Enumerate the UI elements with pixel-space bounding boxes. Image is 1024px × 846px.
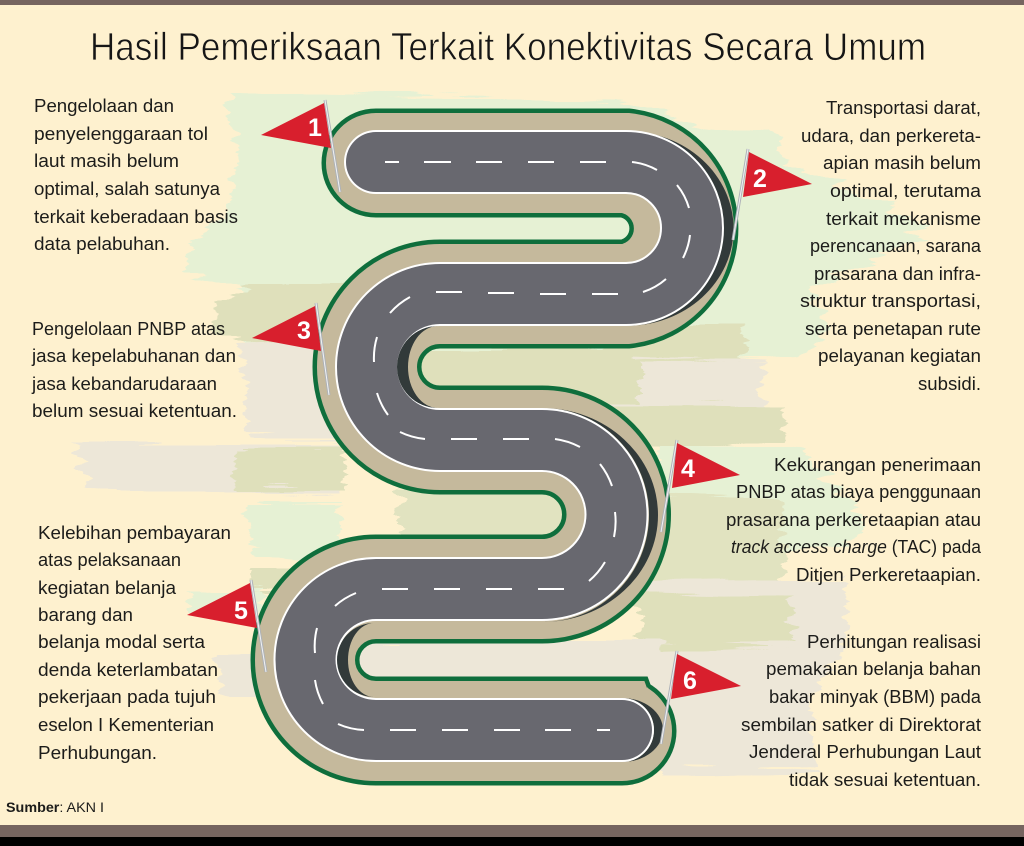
text block 6: tidak sesuai ketentuan.	[789, 770, 981, 790]
road asphalt	[305, 162, 692, 730]
text block 2: apian masih belum	[823, 153, 981, 173]
text block 5: barang dan	[38, 605, 133, 625]
inner-curve shadows	[337, 326, 438, 697]
text block 2: optimal, terutama	[830, 181, 982, 201]
text block 3	[31, 319, 237, 421]
bottom bar	[0, 825, 1024, 837]
text block 3: jasa kepelabuhanan dan	[31, 346, 236, 366]
source note: Sumber: AKN I	[6, 799, 104, 815]
text block 2: serta penetapan rute	[805, 319, 981, 339]
flag 3: 3	[297, 317, 311, 345]
flag 4	[661, 440, 740, 532]
top bar	[0, 0, 1024, 5]
text block 4: Kekurangan penerimaan	[774, 455, 981, 475]
title: Hasil Pemeriksaan Terkait Konektivitas Secara Umum	[90, 26, 926, 69]
text block 3: Pengelolaan PNBP atas	[32, 319, 225, 339]
text block 5: pekerjaan pada tujuh	[38, 687, 216, 707]
text block 1: laut masih belum	[34, 151, 179, 171]
road white edge lines	[305, 162, 692, 730]
winding road	[305, 131, 734, 762]
text block 5: eselon I Kementerian	[38, 715, 214, 735]
flag 1: 1	[308, 114, 322, 142]
flag 6	[661, 651, 741, 744]
text block 5: belanja modal serta	[38, 632, 206, 652]
end-cap notch sand	[620, 681, 649, 700]
text block 1: data pelabuhan.	[34, 234, 170, 254]
flag 2	[733, 149, 812, 240]
text block 1	[34, 96, 238, 254]
text block 2: udara, dan perkereta-	[801, 126, 981, 146]
flag 4: 4	[681, 455, 695, 483]
text block 5: atas pelaksanaan	[38, 550, 181, 570]
text block 5: Perhubungan.	[38, 743, 157, 763]
end-cap notch border	[620, 679, 649, 687]
text block 4: PNBP atas biaya penggunaan	[736, 482, 981, 502]
flag 1	[261, 100, 340, 192]
text block 2: Transportasi darat,	[826, 98, 981, 118]
text block 3: jasa kebandarudaraan	[31, 374, 217, 394]
text block 2: perencanaan, sarana	[810, 236, 982, 256]
text block 6: sembilan satker di Direktorat	[741, 715, 981, 735]
text block 6: Jenderal Perhubungan Laut	[749, 742, 981, 762]
text block 6: Perhitungan realisasi	[807, 632, 981, 652]
text block 4: Ditjen Perkeretaapian.	[796, 565, 981, 585]
text block 1: optimal, salah satunya	[34, 179, 221, 199]
text block 1: Pengelolaan dan	[34, 96, 174, 116]
text block 2	[800, 98, 982, 394]
text block 2: prasarana dan infra-	[814, 264, 981, 284]
flag 6: 6	[683, 667, 697, 695]
text block 2: struktur transportasi,	[800, 291, 981, 311]
brush-stroke background patches	[72, 95, 935, 772]
text block 4: track access charge (TAC) pada	[731, 537, 982, 557]
flag 3	[252, 303, 329, 395]
road centre dashes	[315, 162, 690, 730]
text block 6: pemakaian belanja bahan	[766, 659, 981, 679]
text block 2: subsidi.	[918, 374, 981, 394]
text block 2: pelayanan kegiatan	[818, 346, 981, 366]
text block 4: prasarana perkeretaapian atau	[726, 510, 981, 530]
road sand shoulder	[305, 163, 684, 731]
text block 5: denda keterlambatan	[38, 660, 218, 680]
text block 1: penyelenggaraan tol	[34, 124, 208, 144]
text block 5: Kelebihan pembayaran	[38, 523, 231, 543]
text block 1: terkait keberadaan basis	[34, 207, 238, 227]
text block 6	[741, 632, 982, 790]
road green border	[305, 163, 684, 731]
outer-curve shadows	[542, 131, 734, 762]
flag 5: 5	[234, 597, 248, 625]
text block 6: bakar minyak (BBM) pada	[769, 687, 982, 707]
text block 5: kegiatan belanja	[38, 578, 177, 598]
flag 5	[187, 580, 266, 672]
text block 3: belum sesuai ketentuan.	[32, 401, 237, 421]
black footer strip	[0, 837, 1024, 846]
text block 4	[726, 455, 982, 585]
flag 2: 2	[753, 165, 767, 193]
text block 5	[38, 523, 231, 763]
text block 2: terkait mekanisme	[826, 209, 981, 229]
